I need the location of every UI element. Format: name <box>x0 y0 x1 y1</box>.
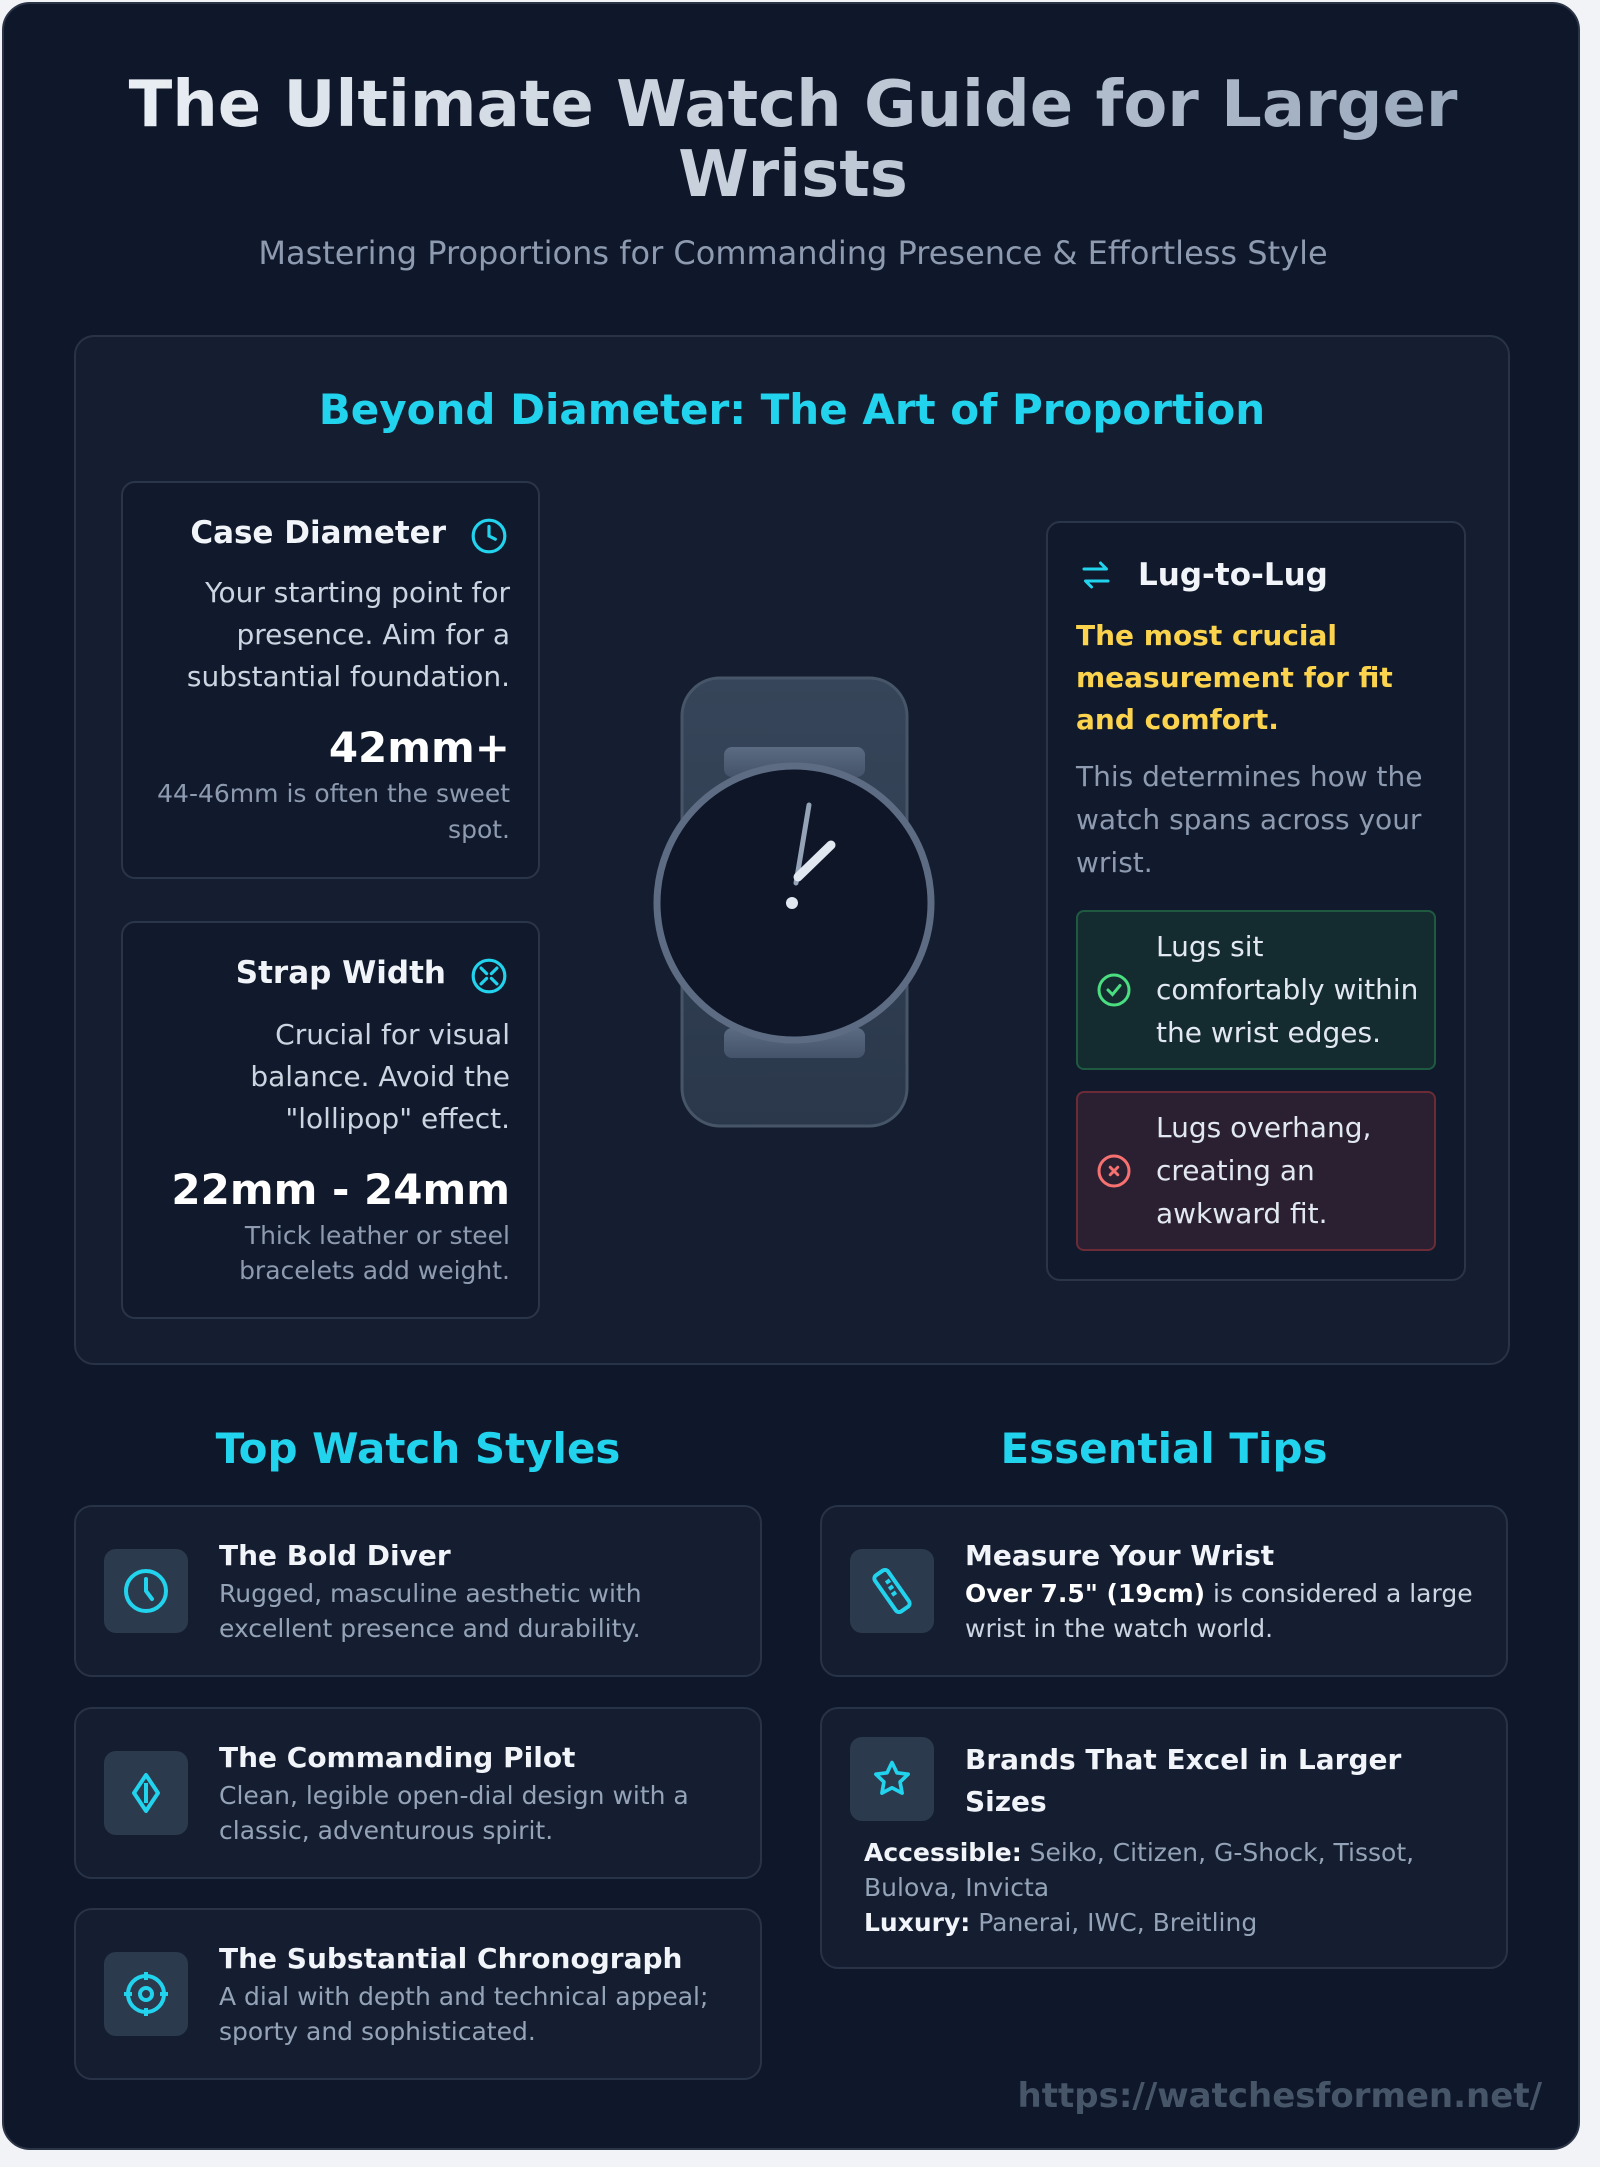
text: comfortably within <box>1156 973 1418 1006</box>
heading <box>965 1743 1402 1818</box>
card: strap width <box>121 921 540 1319</box>
heading: lug-to-lug: Lug-to-Lug <box>1138 557 1328 593</box>
icon: ruler <box>850 1549 934 1633</box>
text <box>219 1942 708 2046</box>
value: 42mm: 42mm+ <box>329 723 510 772</box>
text: highlight: measurement for fit <box>1076 661 1393 694</box>
title: Wrists <box>678 138 908 212</box>
note: spot. <box>448 815 510 844</box>
text: Over 7.5" (19cm) is considered a large <box>965 1579 1473 1608</box>
icon: clock <box>104 1549 188 1633</box>
heading: proportion: Beyond Diameter: The Art of Proportion <box>319 385 1265 434</box>
note: Thick leather or steel <box>245 1221 510 1250</box>
text <box>965 1539 1473 1643</box>
text: The Substantial Chronograph <box>219 1942 682 1975</box>
text: description: wrist. <box>1076 846 1153 879</box>
card: lug to lug <box>1046 521 1466 1281</box>
text: case description: presence. Aim for a <box>236 618 510 651</box>
text <box>219 1741 689 1845</box>
text: strap description: balance. Avoid the <box>250 1060 510 1093</box>
text: case description: substantial foundation. <box>187 660 510 693</box>
text: classic, adventurous spirit. <box>219 1816 553 1845</box>
text: strap description: Crucial for visual <box>275 1018 510 1051</box>
callout: bad fit <box>1076 1091 1436 1251</box>
card: bold diver <box>74 1505 762 1677</box>
text: creating an <box>1156 1154 1315 1187</box>
text: brand list <box>864 1838 1414 1937</box>
card: measure wrist <box>820 1505 1508 1677</box>
heading: Brands That Excel in Larger <box>965 1743 1401 1776</box>
heading: top watch styles: Top Watch Styles <box>216 1424 620 1473</box>
text: highlight: and comfort. <box>1076 703 1279 736</box>
text: Lugs overhang, <box>1156 1111 1371 1144</box>
text: case description: Your starting point for <box>205 576 510 609</box>
text: highlight: The most crucial <box>1076 619 1337 652</box>
text: The Bold Diver <box>219 1539 451 1572</box>
footer url: https://watchesformen.net/ <box>1018 2076 1542 2116</box>
icon: arrows <box>1082 561 1110 589</box>
card: case diameter <box>121 481 540 879</box>
icon: x <box>1098 1154 1130 1188</box>
card: commanding pilot <box>74 1707 762 1879</box>
text: sporty and sophisticated. <box>219 2017 536 2046</box>
text: Lugs sit <box>1156 930 1263 963</box>
card: brands <box>820 1707 1508 1969</box>
text: brand list: Bulova, Invicta <box>864 1873 1049 1902</box>
text: Clean, legible open-dial design with a <box>219 1781 689 1810</box>
text: description: watch spans across your <box>1076 803 1421 836</box>
illustration: watch <box>654 676 934 1128</box>
text: description <box>1076 760 1422 879</box>
note: 44-46mm is often the sweet <box>157 779 510 808</box>
text: case description <box>187 576 510 693</box>
card: chronograph <box>74 1908 762 2080</box>
title <box>4 70 1582 210</box>
text <box>1156 1111 1371 1230</box>
subtitle: Mastering Proportions for Commanding Presence & Effortless Style <box>258 234 1328 272</box>
panel: proportion <box>74 335 1510 1365</box>
callout: good fit <box>1076 910 1436 1070</box>
heading: strap width: Strap Width <box>236 955 446 991</box>
text: the wrist edges. <box>1156 1016 1381 1049</box>
text <box>1156 930 1418 1049</box>
text: brand list: Accessible: Seiko, Citizen, G-Shock, Tissot, <box>864 1838 1414 1867</box>
text <box>219 1539 642 1643</box>
text: brand list: Luxury: Panerai, IWC, Breitling <box>864 1908 1257 1937</box>
note <box>239 1221 510 1285</box>
note <box>157 779 510 844</box>
text: A dial with depth and technical appeal; <box>219 1982 708 2011</box>
text: highlight <box>1076 619 1393 736</box>
icon: clock <box>472 518 506 554</box>
text: description: This determines how the <box>1076 760 1422 793</box>
value: 22-24mm: 22mm - 24mm <box>171 1165 510 1214</box>
icon: compass <box>104 1751 188 1835</box>
icon: star <box>850 1737 934 1821</box>
text: excellent presence and durability. <box>219 1614 641 1643</box>
text: strap description: "lollipop" effect. <box>285 1102 510 1135</box>
note: bracelets add weight. <box>239 1256 510 1285</box>
text: strap description <box>250 1018 510 1135</box>
text: Measure Your Wrist <box>965 1539 1274 1572</box>
heading: case diameter: Case Diameter <box>190 515 446 551</box>
icon: check <box>1098 974 1130 1006</box>
icon: expand <box>472 958 506 994</box>
text: The Commanding Pilot <box>219 1741 575 1774</box>
title: The Ultimate Watch Guide for Larger <box>129 68 1457 142</box>
text: Rugged, masculine aesthetic with <box>219 1579 642 1608</box>
heading: Sizes <box>965 1785 1047 1818</box>
text: wrist in the watch world. <box>965 1614 1273 1643</box>
icon: target <box>104 1952 188 2036</box>
text: awkward fit. <box>1156 1197 1328 1230</box>
heading: essential tips: Essential Tips <box>1000 1424 1328 1473</box>
